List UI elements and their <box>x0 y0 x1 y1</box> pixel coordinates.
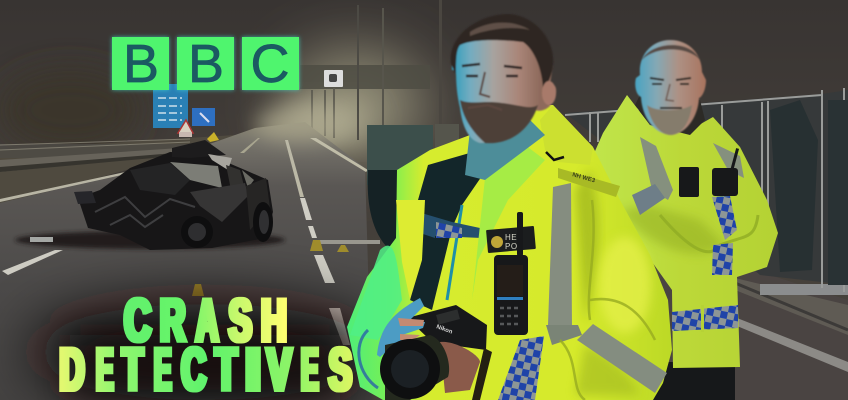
title: CRASH: C <box>124 287 151 354</box>
main officer <box>347 14 672 400</box>
logo block: B: B <box>123 34 159 94</box>
yellow collar flaps <box>396 200 425 300</box>
police patch <box>486 226 536 253</box>
beard <box>647 105 692 135</box>
second officer <box>588 40 778 400</box>
security fence <box>565 88 848 292</box>
neck <box>635 95 705 135</box>
ear <box>542 81 556 105</box>
reflective chest strap <box>640 137 673 200</box>
police radio <box>494 212 528 335</box>
beard <box>460 100 538 143</box>
high-vis jacket <box>588 95 778 368</box>
crashed car <box>15 132 285 250</box>
camera lens <box>380 335 449 400</box>
hair highlight <box>470 23 530 36</box>
hand on lens <box>440 342 480 393</box>
nose and mouth <box>468 72 502 110</box>
hem checks <box>672 305 738 331</box>
evidence markers <box>192 240 349 296</box>
jacket shading and highlights <box>575 170 651 395</box>
hair line <box>642 45 700 60</box>
neck <box>465 120 545 180</box>
logo block: second B <box>177 34 234 94</box>
sleeve checks <box>712 196 737 240</box>
trousers <box>652 362 735 400</box>
logo block: B <box>112 34 169 94</box>
nose <box>666 84 674 101</box>
title vignette <box>30 304 380 400</box>
motorway signs <box>153 84 215 137</box>
reflective vertical band <box>548 183 572 330</box>
police patch: PO <box>505 242 518 251</box>
fog over distant road <box>255 109 345 141</box>
title: CRASH: A <box>196 287 218 354</box>
eyes and brows <box>462 64 522 76</box>
road markings <box>0 138 380 345</box>
strap <box>472 348 492 400</box>
finger skin <box>398 318 424 341</box>
police patch: HE <box>505 233 517 242</box>
gloved fingers <box>377 298 425 357</box>
shoulder rank tab: NH WE3 <box>571 172 596 185</box>
title: CRASH: R <box>160 287 185 354</box>
title: CRASH: S <box>229 287 252 354</box>
title: DETECTIVES <box>60 336 352 400</box>
cuff checks <box>498 336 544 400</box>
camera <box>407 305 487 350</box>
head <box>635 40 706 135</box>
hood drawcord <box>546 152 564 160</box>
green barrier box <box>367 124 459 185</box>
body cameras and radio <box>679 148 739 197</box>
camera: Nikon <box>435 324 453 336</box>
reflective cuff band <box>577 324 667 393</box>
hair <box>451 14 553 88</box>
inner layer and zip <box>410 150 500 310</box>
green sleeve highlight <box>350 246 402 340</box>
fold shadows <box>560 200 655 400</box>
shoulder rank tab <box>558 168 620 197</box>
road surface <box>0 122 372 400</box>
sleeve blue trim <box>359 330 378 388</box>
high-vis jacket <box>347 105 672 400</box>
left verge and barrier <box>0 130 270 205</box>
logo block: C: C <box>250 34 290 94</box>
crossed arm shadow <box>660 215 758 252</box>
right road and pavement <box>640 240 848 400</box>
head <box>451 14 556 143</box>
hood behind shoulder <box>368 170 425 255</box>
title: CRASH: H <box>261 287 287 354</box>
logo block: C <box>242 34 299 94</box>
BBC logo <box>112 34 299 94</box>
title: CRASH <box>124 287 287 354</box>
street light poles and gantry <box>300 0 442 140</box>
logo block: second B: B <box>188 34 224 94</box>
jacket shading <box>620 205 725 254</box>
eyes and brows <box>650 78 691 108</box>
